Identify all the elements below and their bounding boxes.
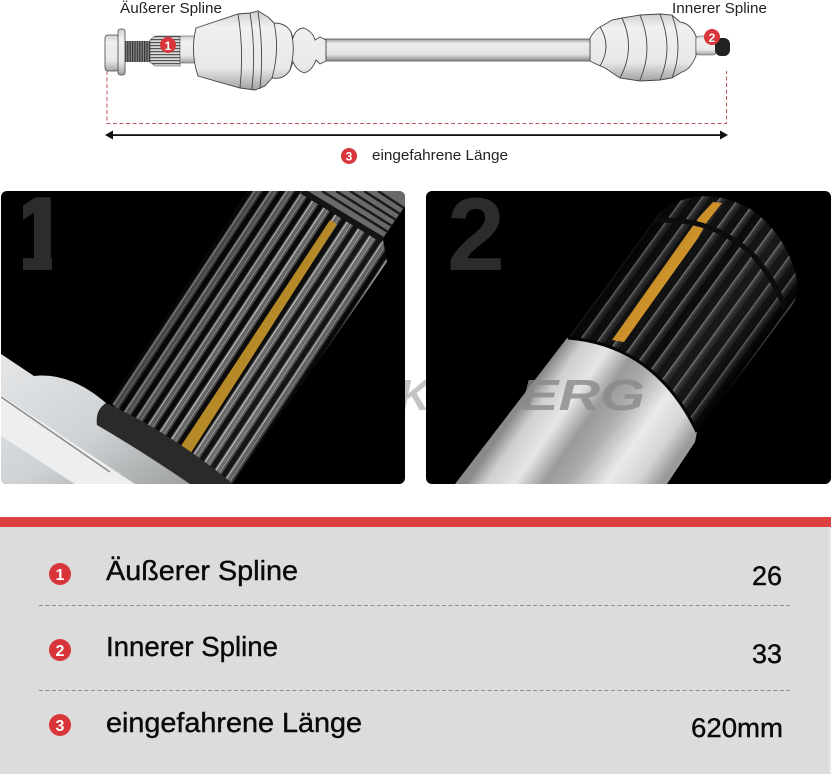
row 3: 3 xyxy=(56,718,65,735)
steel shaft xyxy=(455,338,697,484)
row 2: 2 xyxy=(56,643,65,660)
number 2: 2 xyxy=(447,177,505,293)
inner spline xyxy=(715,38,730,56)
shaft bar xyxy=(322,39,594,61)
badge 2: 2 xyxy=(709,31,716,45)
spline cylinder xyxy=(568,196,798,432)
outer spline xyxy=(150,36,180,66)
outer bolt head xyxy=(105,29,125,75)
length label: 3 xyxy=(346,150,353,164)
panel: outer spline photo xyxy=(1,177,405,484)
row 2: 33 xyxy=(752,639,782,669)
row 3: eingefahrene Länge xyxy=(106,707,362,738)
label: outer spline: Äußerer Spline xyxy=(120,0,222,17)
row 2 xyxy=(49,631,782,669)
outer neck xyxy=(180,36,200,63)
row 2: Innerer Spline xyxy=(106,631,278,662)
badge 1 xyxy=(160,37,176,53)
dark collar xyxy=(97,403,233,484)
row 1: 26 xyxy=(752,561,782,591)
row 1: Äußerer Spline xyxy=(106,555,298,586)
row 3: 620mm xyxy=(691,713,783,743)
panel: spec table xyxy=(0,527,831,774)
length label: eingefahrene Länge xyxy=(372,147,508,164)
row 3 xyxy=(49,707,783,743)
outer joint and boot xyxy=(193,11,326,90)
arrow: retracted length xyxy=(105,130,728,140)
badge 1: 1 xyxy=(165,39,172,53)
spline body xyxy=(110,191,387,484)
thread end xyxy=(302,191,405,238)
label: inner spline: Innerer Spline xyxy=(672,0,767,17)
watermark letter in gap: K xyxy=(398,371,433,420)
row 1 xyxy=(49,555,782,591)
badge 2 xyxy=(704,29,720,45)
inner neck xyxy=(696,36,716,55)
red header band xyxy=(0,517,831,527)
number 1: 1 xyxy=(11,177,69,293)
dashed length bracket xyxy=(107,71,726,124)
drive shaft diagram xyxy=(105,11,730,90)
row 1: 1 xyxy=(56,567,65,584)
panel: inner spline photo xyxy=(426,177,831,484)
outer thread xyxy=(125,41,151,62)
silver flange xyxy=(1,354,190,484)
watermark: ERG xyxy=(520,371,645,420)
inner boot and housing xyxy=(590,14,696,81)
